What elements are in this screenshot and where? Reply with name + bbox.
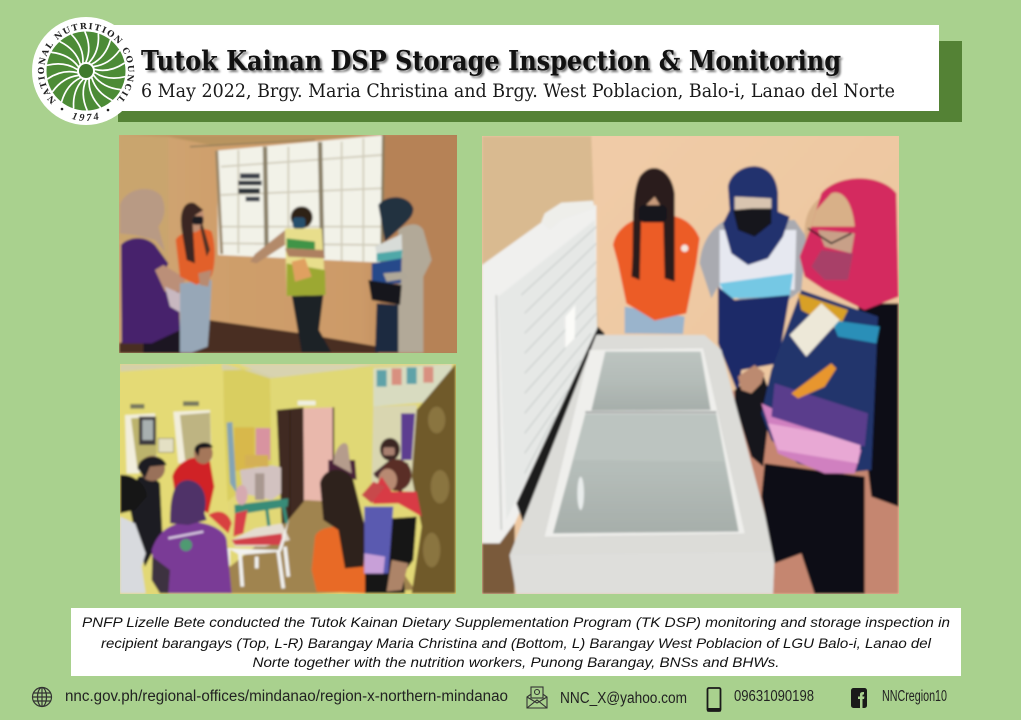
floor — [119, 320, 378, 353]
icon: phone — [707, 688, 721, 712]
alphabet chart — [373, 364, 452, 407]
floor — [222, 500, 415, 593]
person navy — [698, 219, 807, 302]
freezer — [508, 332, 775, 556]
subtitle: 6 May 2022, Brgy. Maria Christina and Brgy. West Poblacion, Balo-i, Lanao del Norte — [141, 81, 895, 102]
posters — [234, 427, 254, 471]
icon: facebook — [851, 688, 867, 708]
open lid — [482, 205, 596, 543]
header banner — [100, 25, 962, 122]
caption box: recipient barangays (Top, L-R) Barangay Maria Christina and (Bottom, L) Barangay West Poblacion of LGU Balo-i, Lanao del — [101, 635, 932, 651]
person 2, orange — [180, 280, 212, 353]
floor — [732, 390, 899, 594]
person left, purple — [143, 330, 182, 353]
window — [217, 135, 383, 263]
woman in black with red scarf — [365, 517, 417, 593]
person 4, cardigan — [375, 303, 401, 353]
person orange — [625, 307, 685, 334]
man in red — [172, 458, 214, 513]
caption box — [71, 608, 961, 676]
doors on left — [125, 413, 157, 473]
sacks and chair — [208, 512, 232, 533]
title: Tutok Kainan DSP Storage Inspection & Monitoring — [141, 46, 841, 77]
caption box: PNFP Lizelle Bete conducted the Tutok Kainan Dietary Supplementation Program (TK DSP) monitoring and storage inspection in — [82, 614, 950, 630]
banner white panel — [100, 25, 939, 111]
website: nnc.gov.ph/regional-offices/mindanao/region-x-northern-mindanao — [65, 688, 508, 705]
banner shadow bar — [118, 41, 962, 122]
title: Tutok Kainan DSP Storage Inspection & Monitoring — [143, 48, 843, 79]
facebook page: NNCregion10 — [882, 688, 947, 705]
phone number: 09631090198 — [734, 688, 814, 705]
person in purple — [152, 522, 232, 593]
photo: right, chest freezer inspection — [478, 130, 908, 600]
fridge & table — [240, 465, 281, 500]
door — [303, 407, 333, 503]
women at back — [328, 460, 357, 480]
woman in orange — [312, 527, 366, 593]
woman in pink hijab — [761, 463, 865, 594]
icon: envelope — [527, 687, 547, 708]
person 3, patterned shirt — [292, 295, 332, 353]
curtain — [412, 364, 456, 593]
boy in white — [120, 517, 146, 593]
photo: top-left, room by the window — [115, 130, 465, 363]
caption box: Norte together with the nutrition workers, Punong Barangay, BNSs and BHWs. — [252, 654, 780, 670]
man in black — [128, 476, 162, 567]
photo: bottom-left, yellow room — [115, 360, 465, 600]
logo: National Nutrition Council: 1974 — [72, 112, 98, 121]
logo: National Nutrition Council: NATIONAL NUTRITION COUNCIL — [38, 22, 134, 104]
icon: globe — [32, 688, 52, 706]
footer contact bar — [32, 687, 947, 712]
email: NNC_X@yahoo.com — [560, 690, 687, 707]
